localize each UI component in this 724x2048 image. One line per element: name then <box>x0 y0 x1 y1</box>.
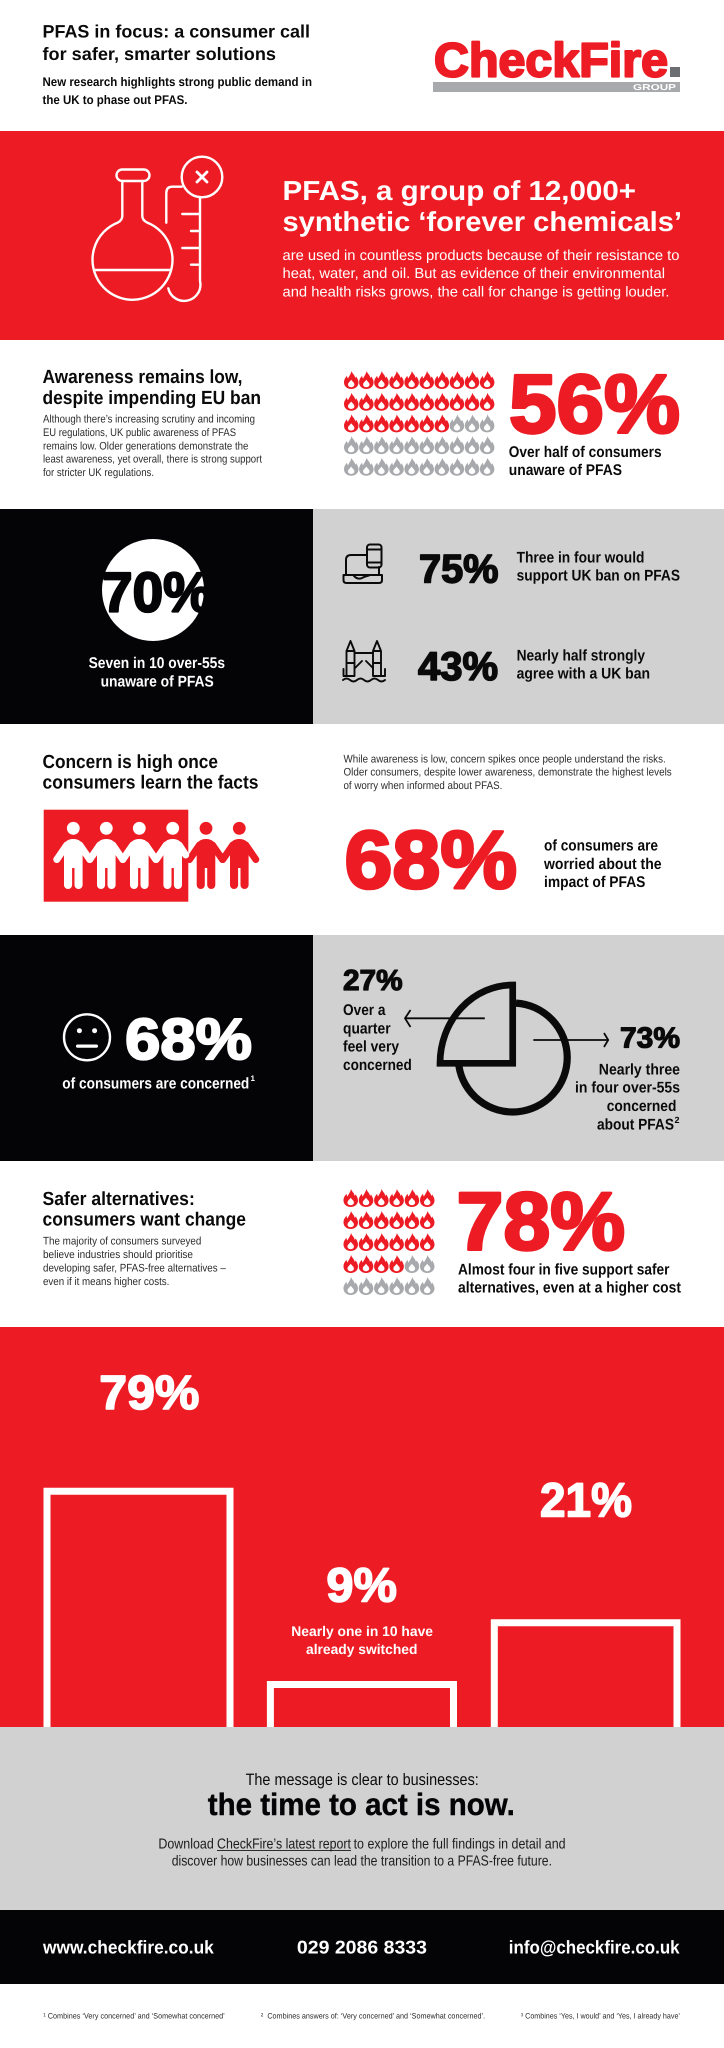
stat: 68% white: 68% <box>125 1007 252 1072</box>
contact: email: info@checkfire.co.uk <box>509 1936 680 1957</box>
text block: safer alternatives body <box>43 1236 227 1288</box>
panel: consumers concerned <box>0 935 313 1161</box>
icon: flask and thermometer <box>93 157 222 301</box>
pictogram: people, four of six highlighted <box>44 810 256 902</box>
icon: neutral face <box>64 1014 110 1060</box>
arrow: to 73% <box>533 1033 608 1047</box>
caption: seven in ten: Seven in 10 over-55s <box>89 655 225 672</box>
caption: consumers concerned: of consumers are concerned <box>62 1076 249 1093</box>
heading: awareness: despite impending EU ban <box>42 388 261 409</box>
caption: 43%: agree with a UK ban <box>517 666 650 683</box>
panel: safer alternatives <box>42 1176 681 1297</box>
text block: concern body <box>344 753 672 792</box>
caption: 73%: Nearly three <box>599 1061 680 1078</box>
text block: awareness body: Although there’s increasing scrutiny and incoming <box>43 414 255 426</box>
bar: 9%: already switched <box>306 1641 417 1657</box>
caption: 27%: feel very <box>343 1039 399 1056</box>
bar: 79%: 79% <box>99 1367 199 1420</box>
title <box>42 22 310 64</box>
caption: seven in ten <box>89 655 225 691</box>
text block: awareness body: for stricter UK regulations. <box>43 467 154 479</box>
logo: CheckFire Group: CheckFire <box>434 34 668 88</box>
bar: 21% <box>494 1475 677 1740</box>
caption: 27%: concerned <box>343 1057 412 1074</box>
chart: exploded pie <box>440 985 567 1112</box>
caption: seven in ten: unaware of PFAS <box>101 674 214 691</box>
footnotes <box>43 2011 680 2020</box>
stat: 43%: 43% <box>418 645 498 689</box>
heading: PFAS group: PFAS, a group of 12,000+ <box>282 175 636 206</box>
stat: 75%: 75% <box>419 548 498 592</box>
subtitle: New research highlights strong public demand in <box>42 75 312 89</box>
stat: 70% in circle: 70% <box>102 561 212 624</box>
text block: awareness body: remains low. Older generations demonstrate the <box>43 440 248 452</box>
caption: 73%: 2 <box>674 1115 680 1125</box>
caption: 78%: Almost four in five support safer <box>458 1261 670 1278</box>
text block: download prompt: discover how businesses can lead the transition to a PFAS-free future. <box>172 1854 552 1870</box>
text block: concern body: Older consumers, despite lower awareness, demonstrate the highest levels <box>344 767 672 779</box>
icon: gavel on laptop <box>344 544 382 583</box>
panel: call to action <box>0 1727 724 1910</box>
logo: CheckFire Group: GROUP <box>633 82 676 92</box>
footnotes: ² Combines answers of: ‘Very concerned’ and ‘Somewhat concerned’. <box>261 2011 485 2020</box>
text block: intro body <box>282 248 680 301</box>
caption: 27%: quarter <box>343 1020 391 1037</box>
text block: safer alternatives body: developing safer, PFAS-free alternatives – <box>43 1263 227 1275</box>
contact: phone: 029 2086 8333 <box>297 1936 427 1957</box>
footnotes: ³ Combines ‘Yes, I would’ and ‘Yes, I already have’ <box>521 2011 680 2020</box>
caption: 68% red <box>543 838 662 891</box>
heading: concern: Concern is high once <box>42 752 218 773</box>
heading: awareness <box>42 367 261 409</box>
bar: 9%: Nearly one in 10 have <box>291 1623 433 1639</box>
caption: 27%: Over a <box>343 1002 386 1019</box>
caption: 73%: about PFAS <box>597 1116 674 1133</box>
caption: 68% red: worried about the <box>543 856 662 873</box>
caption: 27% <box>343 1002 412 1074</box>
text block: intro body: and health risks grows, the call for change is getting louder. <box>282 285 670 301</box>
bar: 21%: 21% <box>540 1475 632 1528</box>
stat: 68% red: 68% <box>344 815 517 906</box>
stat: 73%: 73% <box>620 1023 680 1055</box>
caption: 73%: in four over-55s <box>575 1080 680 1097</box>
heading: concern <box>42 752 258 794</box>
panel: pie chart of concern <box>313 935 724 1161</box>
text block: safer alternatives body: believe industries should prioritise <box>43 1249 193 1261</box>
caption: 75%: support UK ban on PFAS <box>517 568 680 585</box>
panel: concern <box>42 752 672 906</box>
panel: seven in ten over-55s <box>0 509 313 724</box>
heading: safer alternatives <box>42 1189 246 1231</box>
caption: 78%: alternatives, even at a higher cost <box>458 1280 681 1297</box>
caption: 68% red: impact of PFAS <box>544 874 645 891</box>
title: PFAS in focus: a consumer call <box>42 22 310 42</box>
stat: 56%: 56% <box>509 358 680 450</box>
caption: 73%: concerned <box>607 1098 676 1115</box>
heading: PFAS group: synthetic ‘forever chemicals’ <box>282 206 682 237</box>
text block: download prompt: CheckFire’s latest report <box>217 1837 351 1853</box>
subtitle <box>42 75 312 107</box>
panel: bar chart of switching <box>0 1327 724 1740</box>
caption: consumers concerned: 1 <box>250 1074 256 1083</box>
caption: 56%: Over half of consumers <box>509 444 662 461</box>
text block: intro body: are used in countless products because of their resistance to <box>282 248 680 264</box>
contact: website: www.checkfire.co.uk <box>42 1936 214 1957</box>
bar: 79% <box>47 1367 230 1740</box>
panel: contact footer <box>0 1910 724 1984</box>
text: message intro: The message is clear to businesses: <box>246 1771 479 1789</box>
icon grid: 56 flames of 100 <box>344 371 494 476</box>
text block: concern body: of worry when informed about PFAS. <box>344 780 502 792</box>
icon grid: 78 percent flames <box>344 1189 434 1295</box>
text block: download prompt <box>158 1837 566 1870</box>
text block: concern body: While awareness is low, concern spikes once people understand the risks. <box>344 753 666 765</box>
stat: 78%: 78% <box>457 1176 625 1268</box>
caption: 43% <box>517 648 650 683</box>
text block: download prompt: to explore the full findings in detail and <box>354 1837 566 1853</box>
title: for safer, smarter solutions <box>42 44 276 64</box>
stat: 27%: 27% <box>343 965 403 997</box>
bar: 9%: 9% <box>326 1560 397 1613</box>
panel: PFAS introduction <box>0 131 724 340</box>
panel: header <box>42 22 680 107</box>
caption: 75% <box>517 550 680 585</box>
bar: 9% <box>270 1560 454 1740</box>
text block: awareness body: EU regulations, UK public awareness of PFAS <box>43 427 236 439</box>
text block: intro body: heat, water, and oil. But as evidence of their environmental <box>282 266 665 282</box>
caption: 78% <box>458 1261 681 1297</box>
icon: Tower Bridge <box>343 641 385 682</box>
caption: 43%: Nearly half strongly <box>517 648 645 665</box>
stat: 70% in circle <box>102 539 212 641</box>
text block: safer alternatives body: even if it means higher costs. <box>43 1276 169 1288</box>
caption: 75%: Three in four would <box>517 550 644 567</box>
panel: UK ban support <box>313 509 724 724</box>
heading: safer alternatives: Safer alternatives: <box>42 1189 195 1210</box>
heading: awareness: Awareness remains low, <box>42 367 242 388</box>
footnotes: ¹ Combines ‘Very concerned’ and ‘Somewhat concerned’ <box>43 2011 225 2020</box>
subtitle: the UK to phase out PFAS. <box>42 93 188 107</box>
text block: awareness body <box>43 414 262 479</box>
heading: safer alternatives: consumers want change <box>42 1210 246 1231</box>
text block: awareness body: least awareness, yet overall, there is strong support <box>43 454 262 466</box>
panel: awareness <box>42 358 680 479</box>
heading: concern: consumers learn the facts <box>42 773 258 794</box>
caption: 56%: unaware of PFAS <box>509 462 622 479</box>
text block: download prompt: Download <box>158 1837 214 1853</box>
caption: 73% <box>575 1061 680 1133</box>
arrow: to 27% <box>405 1010 485 1027</box>
caption: 68% red: of consumers are <box>544 838 658 855</box>
caption: 56% <box>509 444 662 479</box>
text block: safer alternatives body: The majority of consumers surveyed <box>43 1236 201 1248</box>
heading: the time to act is now: the time to act is now. <box>208 1787 515 1822</box>
heading: PFAS group <box>282 175 682 237</box>
